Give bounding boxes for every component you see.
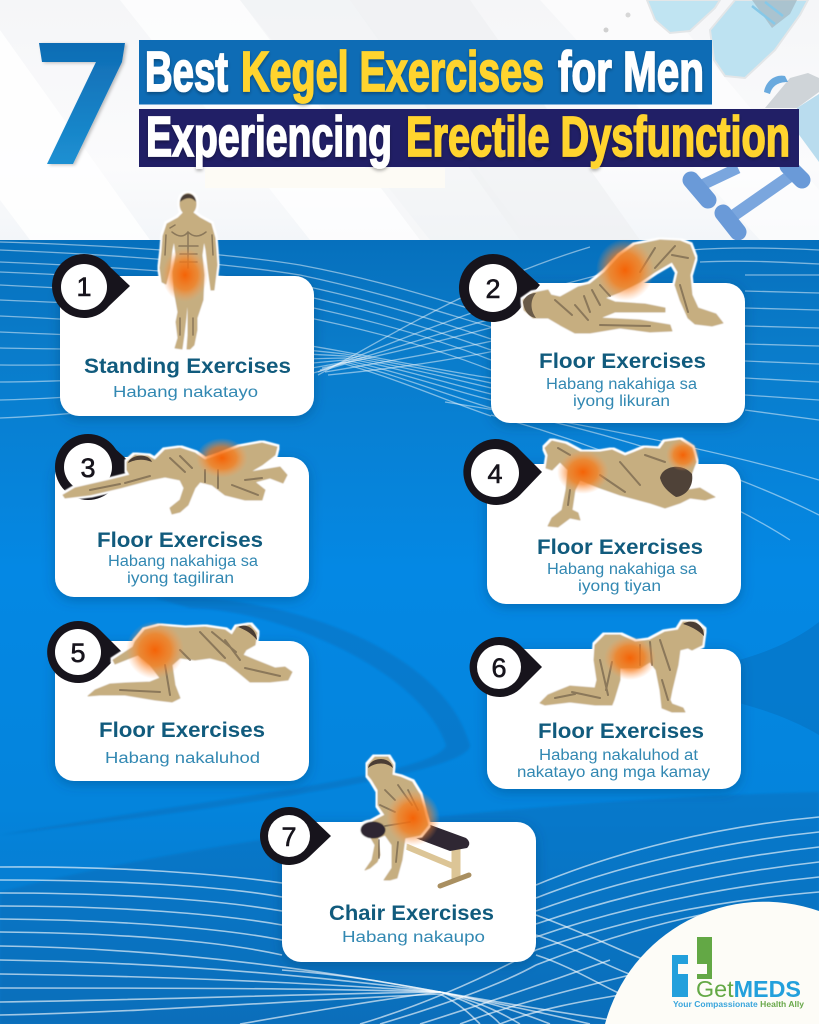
number badge 6 bbox=[470, 637, 542, 697]
label 4: Floor Exercises bbox=[537, 536, 703, 559]
figure: standing man bbox=[160, 194, 217, 349]
label 2: Floor Exercises bbox=[539, 350, 706, 373]
panel: exercise 2 floor on back bbox=[459, 239, 745, 423]
logo icon bbox=[672, 937, 712, 997]
label 4: Habang nakahiga sa bbox=[547, 561, 697, 578]
number badge 1: 1 bbox=[76, 272, 92, 302]
logo tagline: Your Compassionate Health Ally bbox=[673, 999, 804, 1009]
label 7: Habang nakaupo bbox=[342, 929, 485, 946]
bench bbox=[405, 823, 469, 886]
number badge 4 bbox=[463, 439, 542, 505]
number badge 3: 3 bbox=[80, 453, 96, 483]
number badge 3 bbox=[55, 434, 135, 500]
label 3: Floor Exercises bbox=[97, 529, 263, 552]
label 4 bbox=[537, 536, 703, 595]
panel: exercise 3 floor on side bbox=[55, 434, 309, 597]
number badge 7 bbox=[260, 807, 331, 865]
panel: exercise 4 floor on stomach bbox=[463, 439, 741, 604]
label 6: Floor Exercises bbox=[538, 720, 704, 743]
label 1 bbox=[84, 355, 291, 401]
number badge 2 bbox=[459, 254, 540, 322]
label 6: nakatayo ang mga kamay bbox=[517, 764, 710, 781]
label 1: Standing Exercises bbox=[84, 355, 291, 378]
title line 1: Kegel Exercises bbox=[241, 40, 544, 104]
label 3: iyong tagiliran bbox=[127, 570, 234, 587]
label 6 bbox=[517, 720, 710, 781]
label 3: Habang nakahiga sa bbox=[108, 553, 258, 570]
label 5: Floor Exercises bbox=[99, 719, 265, 742]
panel: exercise 7 chair bbox=[260, 757, 536, 962]
title line 1: Best bbox=[145, 40, 228, 104]
label 2: Habang nakahiga sa bbox=[546, 376, 697, 393]
number badge 5 bbox=[47, 621, 122, 683]
figure: side lying bbox=[63, 438, 287, 514]
figure: prone push up bbox=[545, 439, 715, 527]
label 5 bbox=[99, 719, 265, 767]
number badge 4: 4 bbox=[487, 459, 503, 489]
figure: glute bridge bbox=[523, 239, 723, 333]
title line 1: for Men bbox=[558, 40, 704, 104]
blue background with curves bbox=[0, 240, 819, 1024]
number badge 2: 2 bbox=[485, 274, 501, 304]
label 6: Habang nakaluhod at bbox=[539, 747, 699, 764]
title line 2: Experiencing bbox=[146, 105, 392, 169]
label 7: Chair Exercises bbox=[329, 902, 494, 925]
title number 7 bbox=[39, 43, 125, 164]
label 5: Habang nakaluhod bbox=[105, 750, 260, 767]
panel: exercise 1 standing bbox=[52, 194, 314, 416]
label 4: iyong tiyan bbox=[578, 578, 661, 595]
label 7 bbox=[329, 902, 494, 946]
title line 2 bbox=[139, 105, 799, 169]
logo wordmark: GetMEDS bbox=[696, 976, 801, 1002]
number badge 5: 5 bbox=[70, 638, 86, 668]
label 1: Habang nakatayo bbox=[113, 384, 258, 401]
figure: kneeling stretch bbox=[88, 621, 292, 702]
header background bbox=[0, 0, 819, 240]
number badge 6: 6 bbox=[491, 653, 507, 683]
logo: GetMEDS bbox=[605, 902, 819, 1024]
label 2: iyong likuran bbox=[573, 393, 670, 410]
number badge 7: 7 bbox=[281, 822, 297, 852]
figure: seated on bench bbox=[361, 757, 469, 886]
number badge 1 bbox=[52, 254, 130, 318]
decorative sneakers, bottle and dumbbells bbox=[604, 0, 819, 232]
label 3 bbox=[97, 529, 263, 587]
panel: exercise 5 floor kneeling bbox=[47, 621, 309, 781]
label 2 bbox=[539, 350, 706, 410]
panel: exercise 6 floor hands and knees bbox=[470, 622, 741, 789]
figure: hands and knees bbox=[540, 622, 704, 712]
